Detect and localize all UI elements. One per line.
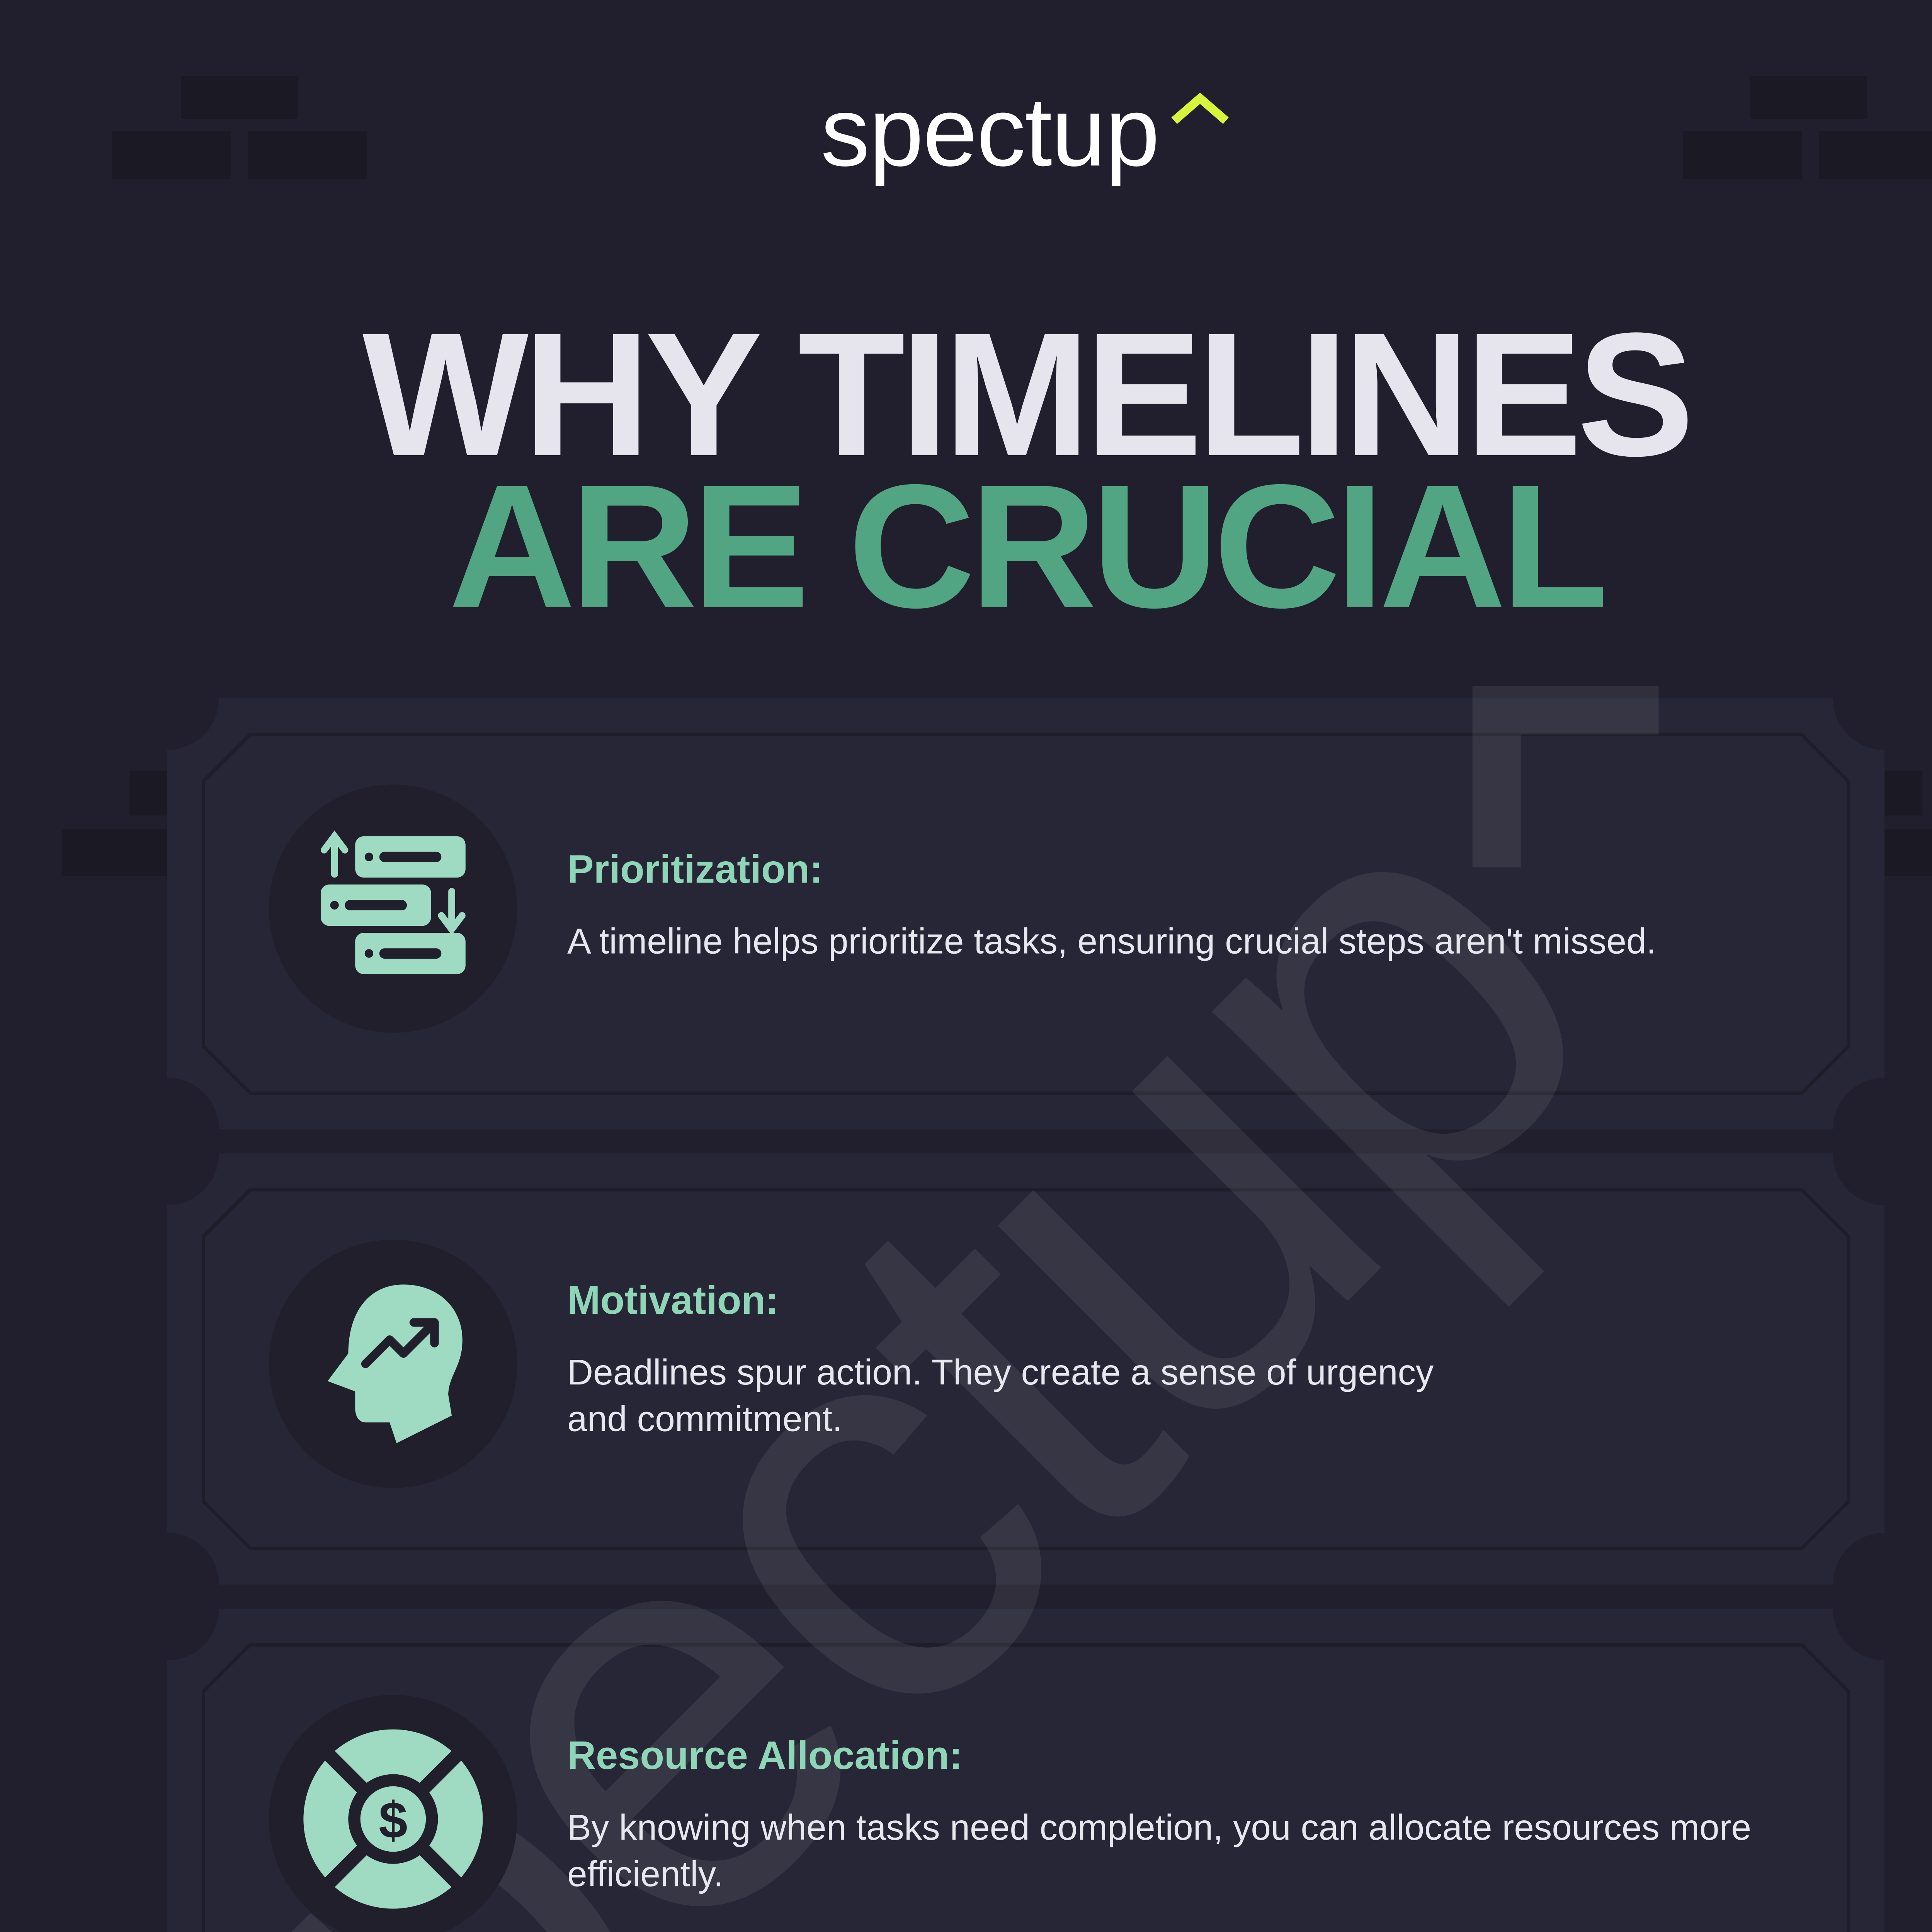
- title: [0, 319, 1932, 622]
- watermark caret: [1466, 681, 1664, 871]
- card 3: [0, 1609, 1932, 1932]
- title: ARE CRUCIAL: [449, 448, 1603, 645]
- heading: Motivation:: [567, 1277, 779, 1322]
- body: By knowing when tasks need completion, you can allocate resources more efficiently.: [567, 1809, 1751, 1895]
- icon: resource: $: [379, 1792, 408, 1849]
- heading: Resource Allocation:: [567, 1733, 963, 1778]
- body: A timeline helps prioritize tasks, ensuring crucial steps aren't missed.: [567, 922, 1656, 962]
- title: WHY TIMELINES: [362, 296, 1689, 493]
- heading: Prioritization:: [567, 847, 823, 891]
- icon: head growth: [269, 1240, 517, 1488]
- cards container: [167, 698, 1884, 1932]
- logo: spectup: [821, 78, 1159, 188]
- icon: resource: [269, 1695, 517, 1932]
- body: Deadlines spur action. They create a sense of urgency and commitment.: [567, 1354, 1434, 1440]
- decorative bricks: [0, 0, 1932, 896]
- card 1: [0, 698, 1932, 1129]
- card 2: [0, 1153, 1932, 1585]
- icon: prioritization: [269, 784, 517, 1033]
